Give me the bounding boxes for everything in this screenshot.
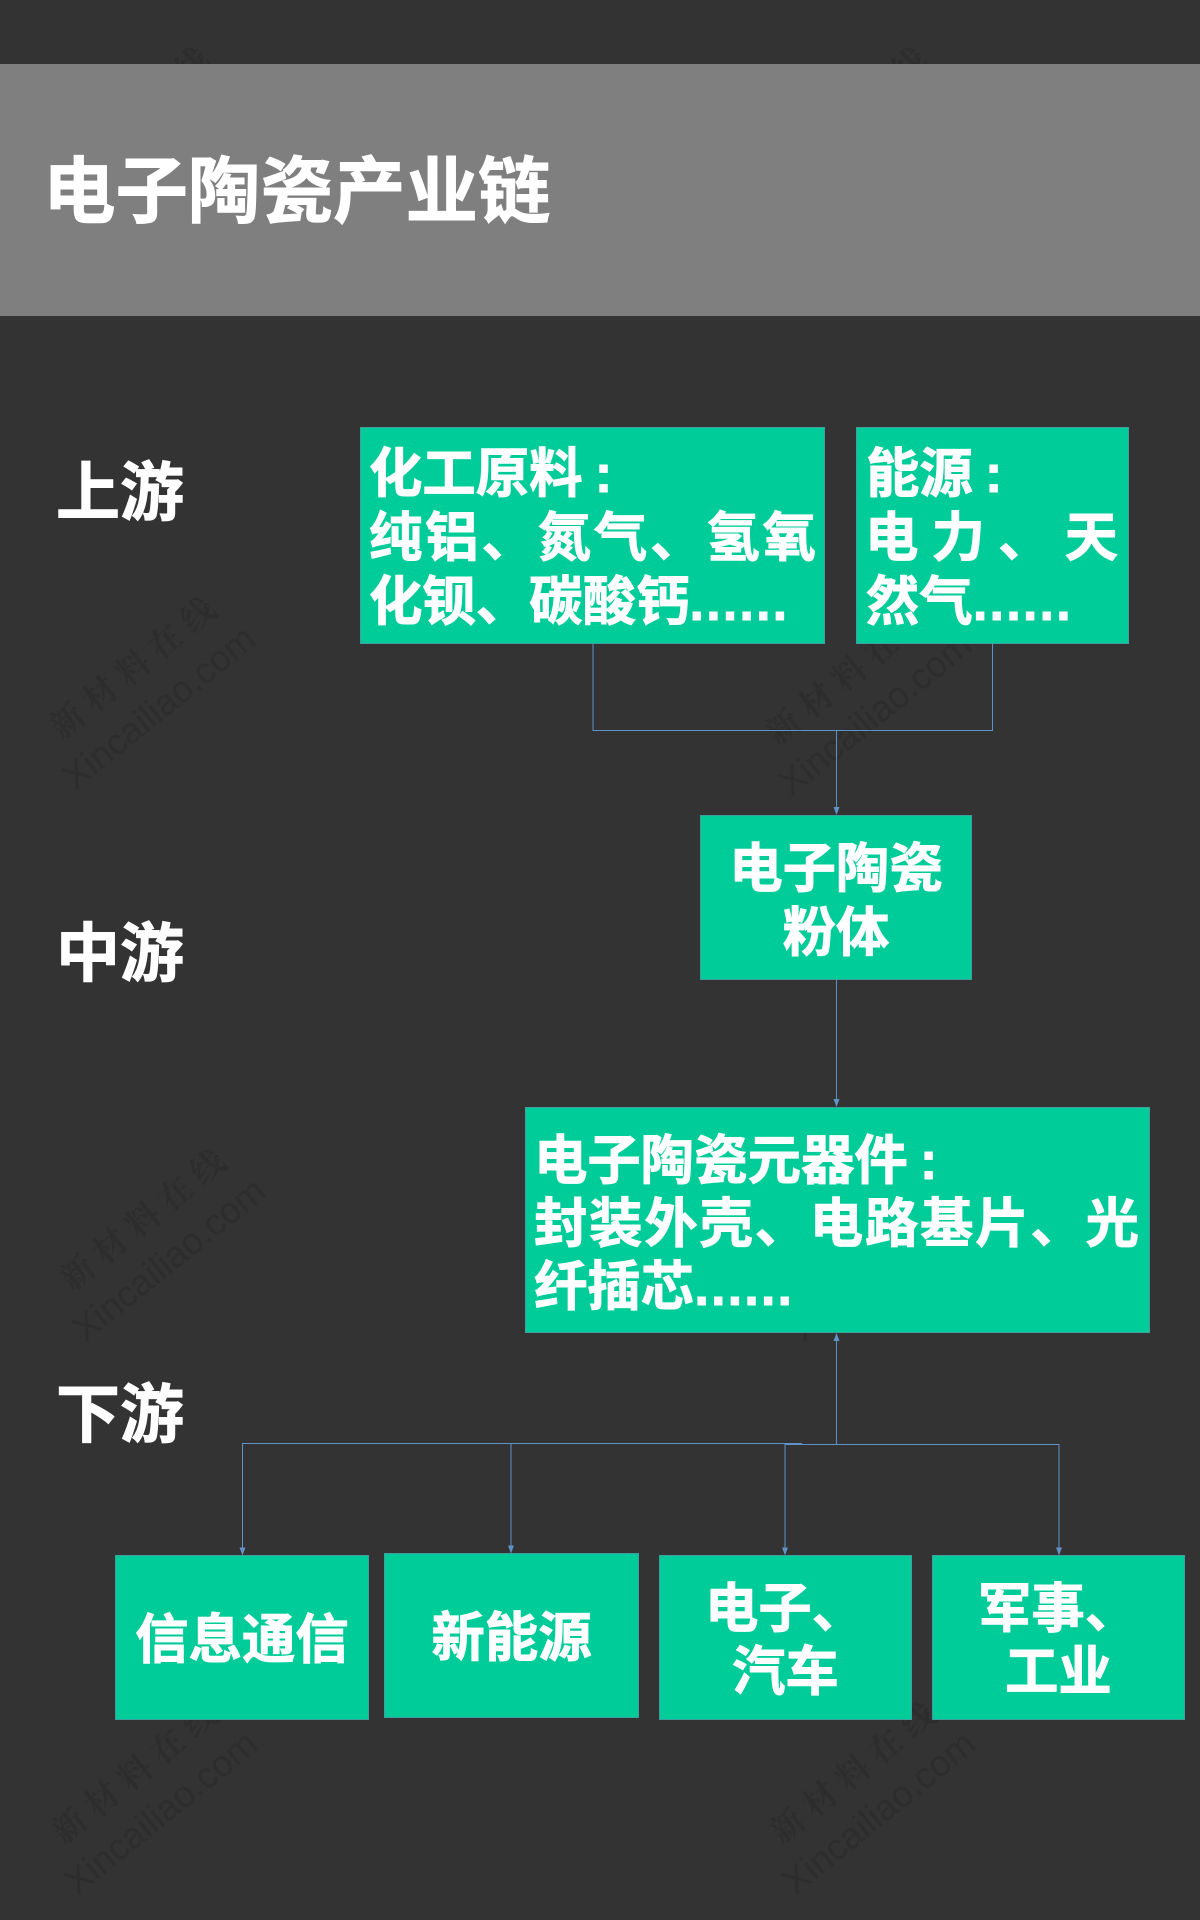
watermarks: 新材料在线 xyxy=(44,585,230,746)
watermarks: Xincailiao.com xyxy=(774,1722,983,1902)
arrows: distribution to application boxes xyxy=(240,1444,1062,1556)
watermarks: Xincailiao.com xyxy=(56,1722,265,1902)
stage label: upstream: 上游 xyxy=(56,442,184,534)
arrow: raw materials to powder xyxy=(593,644,992,815)
materials line: 化钡、碳酸钙...... xyxy=(369,559,789,636)
panel: chemical raw materials xyxy=(360,427,825,644)
panel: telecom xyxy=(115,1555,369,1720)
panel: military and industry xyxy=(932,1555,1185,1720)
heading: 化工原料: xyxy=(369,431,612,508)
watermarks: 新材料在线 xyxy=(46,1690,232,1851)
electronics label: 电子、 xyxy=(705,1566,865,1643)
industry label: 工业 xyxy=(1005,1629,1112,1706)
telecom label: 信息通信 xyxy=(135,1597,349,1674)
panel: ceramic components xyxy=(525,1107,1150,1333)
materials line: 纯铝、氮气、氢氧 xyxy=(369,495,816,572)
new energy label: 新能源 xyxy=(431,1595,592,1672)
title: 电子陶瓷产业链 xyxy=(43,133,550,238)
heading: 电子陶瓷元器件: xyxy=(534,1118,938,1195)
watermarks: 新材料在线 xyxy=(38,35,224,196)
watermarks: Xincailiao.com xyxy=(782,1169,991,1349)
automotive label: 汽车 xyxy=(732,1629,839,1706)
watermarks: Xincailiao.com xyxy=(64,1169,273,1349)
panel: ceramic powder xyxy=(700,815,972,980)
stage label: downstream: 下游 xyxy=(56,1364,184,1456)
watermarks: 新材料在线 xyxy=(54,1137,240,1298)
watermarks: 新材料在线 xyxy=(764,1690,950,1851)
components line: 纤插芯...... xyxy=(534,1244,794,1321)
heading: 能源: xyxy=(866,431,1003,508)
powder label: 电子陶瓷 xyxy=(729,826,943,903)
watermarks: 新材料在线 xyxy=(772,1137,958,1298)
arrow: powder to components xyxy=(834,980,840,1107)
energy line: 电 力 、 天 xyxy=(865,495,1118,572)
powder label: 粉体 xyxy=(783,890,889,967)
panel: energy xyxy=(856,427,1129,644)
watermarks: Xincailiao.com xyxy=(54,617,263,797)
watermarks: 新材料在线 xyxy=(755,35,941,196)
military label: 军事、 xyxy=(978,1566,1138,1643)
stage label: midstream: 中游 xyxy=(56,903,184,995)
watermarks: 新材料在线 xyxy=(760,591,946,752)
components line: 封装外壳、电路基片、光 xyxy=(534,1181,1139,1258)
watermarks: Xincailiao.com xyxy=(770,623,979,803)
panel: new energy xyxy=(384,1553,639,1718)
arrow: applications to components xyxy=(834,1333,840,1444)
panel: electronics and automotive xyxy=(659,1555,912,1720)
energy line: 然气...... xyxy=(866,559,1073,636)
header band xyxy=(0,64,1200,316)
